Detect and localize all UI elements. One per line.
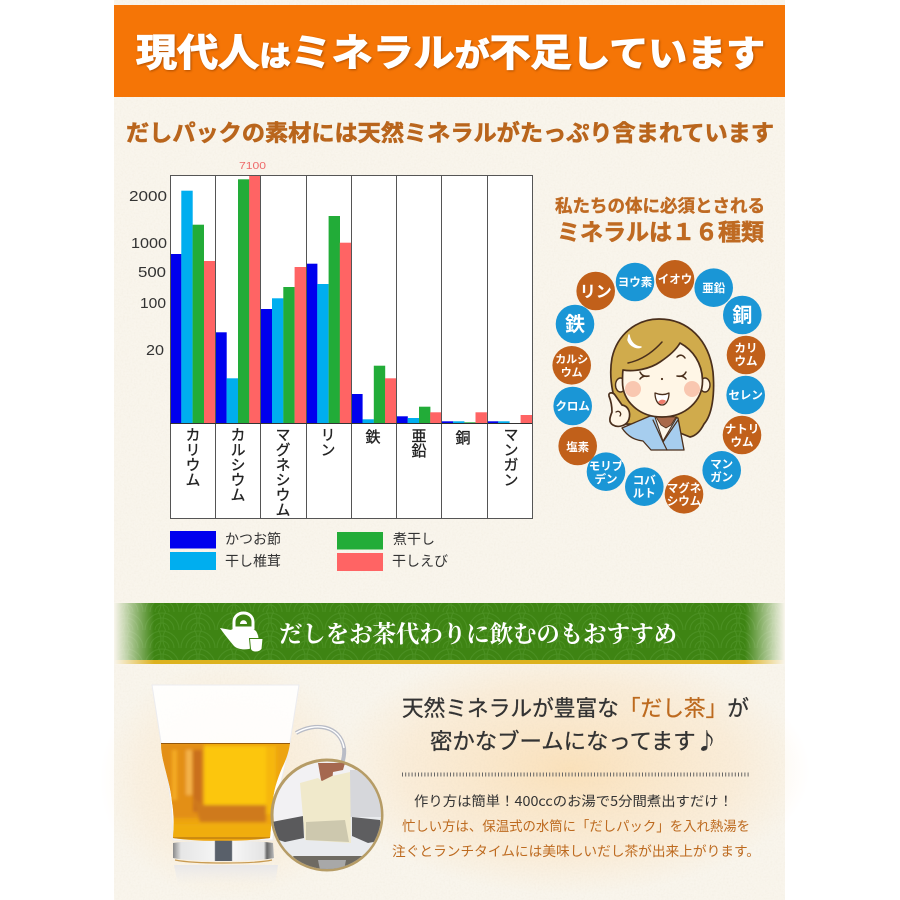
heading: 16 minerals: 私たちの体に必須とされる	[555, 193, 765, 218]
nose	[661, 378, 663, 380]
ナトリウム: ウム	[730, 434, 754, 450]
category labels: カリウム	[182, 427, 204, 487]
マグネシウム	[665, 475, 703, 514]
category labels: マグネシウム	[272, 427, 294, 517]
hair	[611, 319, 714, 437]
background	[350, 770, 381, 818]
heading: 16 minerals: ミネラルは１６種類	[557, 213, 764, 247]
ヨウ素	[616, 263, 654, 301]
bars: カルシウム	[215, 175, 261, 423]
illustration: smiling woman	[609, 319, 714, 450]
bars: カリウム	[170, 191, 215, 423]
マンガン: ガン	[710, 469, 733, 485]
bars: リン	[306, 216, 351, 423]
マンガン	[702, 451, 741, 490]
jacket	[622, 416, 684, 450]
y axis labels: 2000	[129, 188, 167, 205]
chart legend: 干しえび	[392, 551, 448, 571]
bars: マンガン	[487, 415, 532, 423]
heading: 16 minerals	[555, 193, 765, 247]
y axis labels	[129, 188, 167, 359]
dotted divider	[402, 772, 750, 776]
photo: glass cup of tea	[152, 685, 344, 885]
カリウム	[727, 336, 765, 374]
クロム	[553, 387, 592, 425]
icon: teapot and cup	[220, 613, 263, 652]
マンガン: マン	[710, 456, 733, 472]
headline: dashi tea: 密かなブームになってます♪	[430, 724, 718, 756]
bars: 亜鉛	[396, 407, 442, 423]
bangs line	[628, 342, 662, 363]
y axis labels: 20	[146, 342, 164, 359]
鉄	[556, 305, 594, 343]
category labels: 鉄	[362, 429, 384, 444]
ヨウ素: ヨウ素	[618, 274, 653, 290]
ナトリウム	[723, 416, 761, 454]
bars	[170, 175, 532, 423]
mineral circles	[552, 260, 765, 514]
headline: dashi tea	[402, 691, 749, 756]
face	[622, 343, 703, 417]
banner text: だしをお茶代わりに飲むのもおすすめ	[279, 615, 677, 649]
mouth	[655, 393, 669, 405]
cheeks	[625, 381, 641, 397]
リン	[576, 272, 615, 310]
body text: 注ぐとランチタイムには美味しいだし茶が出来上がります。	[392, 840, 760, 860]
category labels: リン	[318, 427, 338, 457]
カリウム: カリ	[734, 340, 758, 356]
header band	[114, 5, 785, 97]
body text: 作り方は簡単！400ccのお湯で5分間煮出すだけ！	[414, 790, 733, 810]
ナトリウム: ナトリ	[725, 421, 759, 437]
カリウム: ウム	[734, 353, 758, 369]
亜鉛: 亜鉛	[702, 280, 726, 296]
リン: リン	[580, 278, 612, 302]
コバルト	[625, 467, 664, 506]
collar and vest	[655, 417, 677, 441]
headline: dashi tea: 天然ミネラルが豊富な「だし茶」が	[402, 691, 749, 723]
銅	[723, 296, 762, 334]
steel pot	[272, 817, 384, 870]
カルシウム: ウム	[561, 364, 583, 380]
セレン: セレン	[728, 387, 763, 403]
chart legend	[170, 529, 448, 571]
ears	[616, 378, 626, 392]
カルシウム	[552, 346, 591, 385]
eyes and brow	[640, 355, 686, 379]
y axis labels: 100	[140, 295, 166, 312]
カルシウム: カルシ	[555, 351, 588, 367]
マグネシウム: マグネ	[667, 480, 701, 496]
category labels: カルシウム	[228, 427, 248, 502]
tea	[161, 743, 290, 841]
chart legend: かつお節	[225, 529, 281, 549]
イオウ	[656, 260, 694, 299]
イオウ: イオウ	[658, 271, 692, 287]
コバルト: コバ	[633, 472, 656, 488]
plot area	[170, 175, 532, 518]
鉄: 鉄	[565, 308, 585, 337]
モリブデン: モリブ	[589, 458, 624, 474]
モリブデン	[587, 452, 625, 491]
category labels: マンガン	[500, 427, 522, 487]
コバルト: ルト	[633, 485, 656, 501]
finger	[318, 763, 345, 781]
body text: 忙しい方は、保温式の水筒に「だしパック」を入れ熱湯を	[402, 815, 750, 835]
glass base	[173, 841, 274, 861]
chart legend: 煮干し	[393, 529, 435, 549]
chart legend: 干し椎茸	[225, 551, 281, 571]
paper background panel	[100, 0, 810, 900]
y axis labels: 1000	[131, 235, 167, 252]
bars: マグネシウム	[261, 267, 306, 423]
マグネシウム: シウム	[667, 493, 701, 509]
subtitle: だしパックの素材には天然ミネラルがたっぷり含まれています	[126, 116, 774, 148]
bars: 銅	[442, 412, 487, 423]
pointing hand	[609, 393, 630, 426]
cup reflection	[174, 865, 278, 885]
peak value label: 7100	[239, 161, 267, 172]
bars: 鉄	[351, 366, 396, 423]
銅: 銅	[732, 299, 752, 328]
glass handle	[296, 727, 344, 770]
tea bag	[300, 772, 351, 843]
category labels: 銅	[452, 430, 474, 446]
title: 現代人 はミネラル が不足しています	[136, 22, 765, 77]
category labels: 亜鉛	[408, 428, 430, 458]
category labels	[182, 427, 522, 517]
inset photo: dashi pack	[272, 760, 385, 870]
クロム: クロム	[555, 398, 590, 414]
y axis labels: 500	[138, 264, 166, 281]
green banner	[114, 602, 785, 665]
モリブデン: デン	[594, 471, 618, 487]
body text	[392, 790, 760, 860]
bar chart: mineral content	[129, 161, 532, 518]
セレン	[726, 376, 765, 414]
亜鉛	[694, 268, 733, 307]
塩素	[558, 427, 597, 465]
hair highlight	[628, 335, 641, 348]
glass bowl	[152, 685, 299, 840]
塩素: 塩素	[566, 439, 590, 455]
